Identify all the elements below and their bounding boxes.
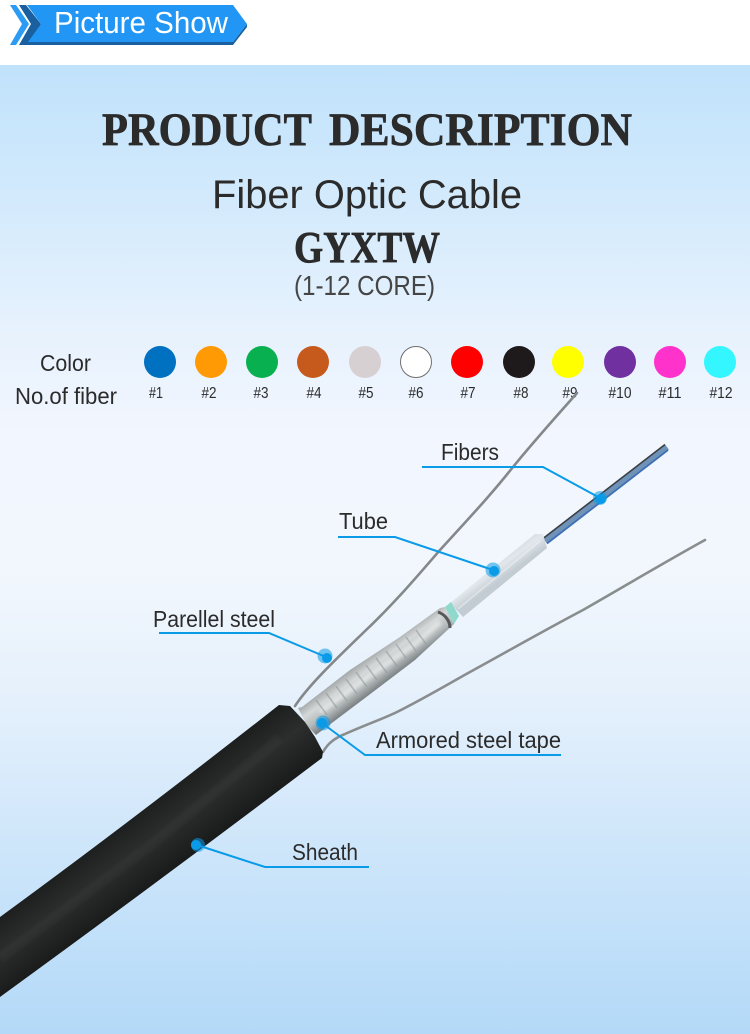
fiber numbers bbox=[149, 385, 733, 402]
armored steel tape bbox=[298, 602, 459, 735]
fiber numbers: #5 bbox=[358, 385, 374, 402]
title: PRODUCT bbox=[102, 104, 312, 156]
callout: Parellel steel: Parellel steel bbox=[153, 606, 275, 632]
callout: Parellel steel bbox=[153, 606, 332, 664]
callout: Fibers bbox=[422, 439, 607, 505]
parallel steel wire right bbox=[323, 540, 705, 752]
fiber numbers: #2 bbox=[202, 385, 217, 402]
fiber color legend bbox=[15, 346, 736, 409]
callout: Sheath: Sheath bbox=[292, 839, 358, 865]
callout: Armored steel tape: Armored steel tape bbox=[376, 727, 561, 753]
model name: GYXTW bbox=[294, 223, 440, 272]
fiber numbers: #7 bbox=[460, 385, 476, 402]
subtitle: Fiber Optic Cable: Fiber Optic Cable bbox=[212, 173, 522, 217]
cable illustration bbox=[0, 393, 705, 997]
title: DESCRIPTION bbox=[329, 104, 632, 156]
callout: Armored steel tape bbox=[316, 716, 561, 755]
fiber numbers: #8 bbox=[514, 385, 529, 402]
fiber numbers: #1 bbox=[149, 385, 163, 402]
fiber numbers: #3 bbox=[254, 385, 269, 402]
callout: Sheath bbox=[191, 838, 369, 867]
legend label: Color: Color bbox=[40, 350, 91, 376]
banner text: Picture Show bbox=[54, 5, 229, 40]
core count: (1-12 CORE) bbox=[294, 270, 435, 301]
fiber numbers: #10 bbox=[608, 385, 632, 402]
color swatches bbox=[144, 346, 736, 378]
fiber numbers: #9 bbox=[562, 385, 578, 402]
title bbox=[102, 104, 632, 156]
tube bbox=[450, 534, 547, 617]
fiber numbers: #4 bbox=[306, 385, 322, 402]
callout: Fibers: Fibers bbox=[441, 439, 499, 465]
fiber numbers: #12 bbox=[710, 385, 733, 402]
fiber numbers: #6 bbox=[408, 385, 424, 402]
callout: Tube: Tube bbox=[339, 508, 388, 534]
fibers bbox=[543, 444, 668, 544]
parallel steel wire left bbox=[295, 393, 577, 706]
legend label: No.of fiber: No.of fiber bbox=[15, 383, 117, 409]
fiber numbers: #11 bbox=[658, 385, 682, 402]
banner: Picture Show bbox=[10, 5, 247, 45]
icon: double chevron bbox=[10, 5, 41, 45]
callout: Tube bbox=[338, 508, 500, 578]
sheath bbox=[0, 705, 323, 997]
banner arrow shape bbox=[27, 5, 247, 45]
